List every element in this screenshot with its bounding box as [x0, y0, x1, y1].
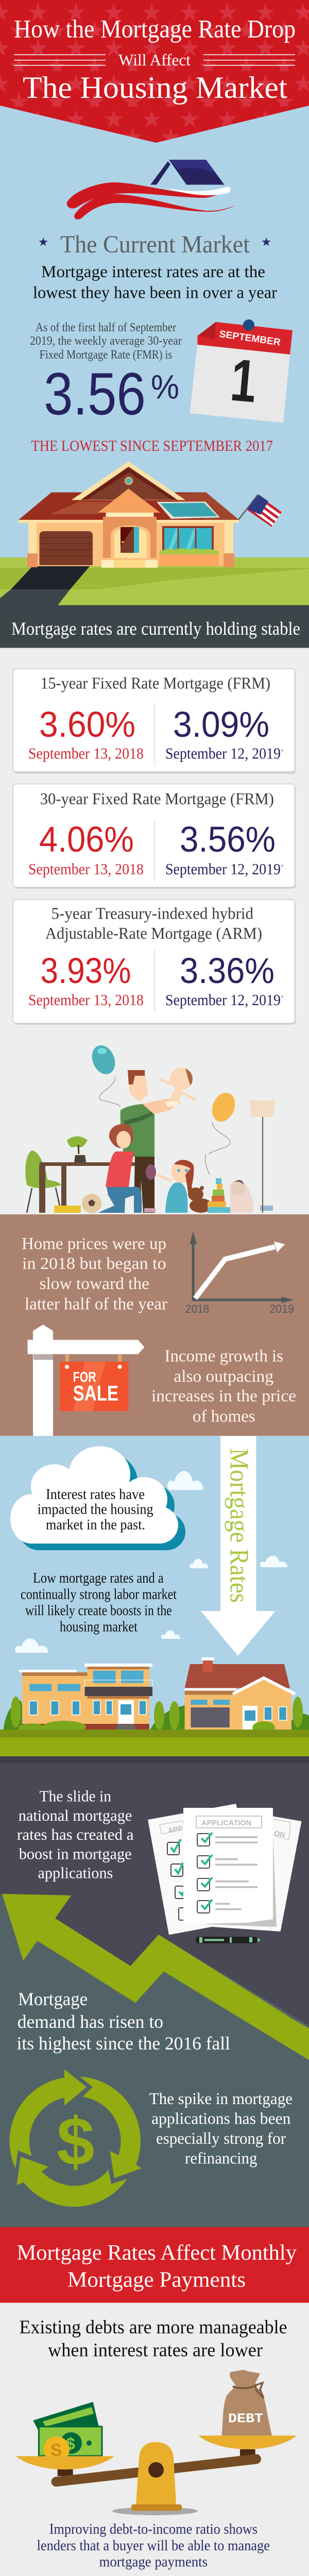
- balloon: teal: [88, 1042, 121, 1106]
- card: 30-year fixed: 3.56%: [180, 819, 276, 859]
- left pan with cash and coin: S: [50, 2441, 62, 2460]
- section: brown home prices: [0, 1214, 309, 1436]
- card: 5-year ARM: *: [281, 995, 284, 1001]
- text: income growth: increases in the price: [151, 1387, 296, 1405]
- text: debt-to-income ratio: [37, 2521, 270, 2570]
- card: 30-year fixed: [13, 784, 296, 889]
- big number: 3.56 percent: 3.56: [44, 361, 146, 428]
- girl with doll: [146, 1160, 194, 1213]
- illustration: suburban house with flag: [19, 462, 282, 568]
- baby: [160, 1067, 196, 1107]
- text: income growth: also outpacing: [174, 1367, 273, 1386]
- chart: home price growth 2018 to 2019: [185, 1232, 294, 1315]
- section: blue mortgage rates sky: [0, 1436, 309, 1732]
- card: 30-year fixed: September 12, 2019: [165, 860, 281, 878]
- section band: rates affect monthly payments: Mortgage Rates Affect Monthly: [16, 2241, 297, 2265]
- icon: house and flag swoosh logo: [67, 160, 235, 219]
- table and chair: [25, 1137, 142, 1213]
- text: as of first half of september: Fixed Mortgage Rate (FMR) is: [39, 348, 172, 362]
- card: 30-year fixed: 30-year Fixed Rate Mortgage (FRM): [40, 789, 274, 808]
- text: low mortgage rates and labor market: housing market: [60, 1619, 138, 1635]
- big number: 3.56 percent: %: [151, 368, 179, 406]
- icon: for sale sign: [28, 1325, 144, 1436]
- woman kneeling: [98, 1124, 142, 1213]
- pen: [196, 1937, 261, 1943]
- text: income growth: Income growth is: [165, 1347, 283, 1366]
- text: slide in national mortgage rates: boost in mortgage: [19, 1844, 132, 1863]
- section background: light blue market: [0, 103, 309, 605]
- cloud callout: interest rates: impacted the housing: [38, 1501, 153, 1518]
- icon: for sale sign: FOR: [73, 1369, 96, 1385]
- foreground shrubs: [19, 1721, 275, 1734]
- text: rates lowest in over a year: lowest they have been in over a year: [33, 284, 277, 302]
- header banner: [0, 0, 309, 143]
- text: low mortgage rates and labor market: continually strong labor market: [21, 1587, 177, 1602]
- text: low mortgage rates and labor market: will likely create boosts in the: [25, 1603, 172, 1619]
- text: home prices up in 2018: latter half of the year: [25, 1295, 167, 1314]
- text: low mortgage rates and labor market: Low mortgage rates and a: [33, 1570, 164, 1586]
- section band: rates holding stable: [0, 605, 309, 648]
- text: spike in applications for refinancing: refinancing: [185, 2148, 257, 2167]
- front page: APPLICATION: [201, 1819, 251, 1827]
- icon: refinance cycle with dollar: [9, 2069, 142, 2207]
- left pan with cash and coin: [16, 2402, 114, 2469]
- text: as of first half of september: 2019, the weekly average 30-year: [30, 334, 182, 348]
- text: mortgage demand highest since 2016: Mortgage: [18, 1989, 88, 2009]
- right pan with debt bag: DEBT: [228, 2411, 263, 2426]
- card: 15-year fixed: [13, 669, 296, 774]
- heading: the current market: The Current Market: [60, 231, 250, 258]
- text: spike in applications for refinancing: [149, 2089, 293, 2167]
- small clouds: [15, 1471, 287, 1653]
- card: 5-year ARM: 5-year Treasury-indexed hybrid: [52, 904, 253, 922]
- cloud shadow: [18, 1453, 185, 1550]
- trees and bushes: [3, 1697, 309, 1731]
- card: 5-year ARM: [13, 900, 296, 1025]
- card: 30-year fixed: 4.06%: [39, 819, 134, 859]
- left pan with cash and coin: $: [66, 2434, 75, 2453]
- left page: [148, 1804, 256, 1935]
- heading: existing debts manageable: [20, 2317, 287, 2361]
- left page: APP: [167, 1824, 183, 1835]
- text: spike in applications for refinancing: The spike in mortgage: [149, 2089, 293, 2108]
- text: mortgage demand highest since 2016: its highest since the 2016 fall: [16, 2033, 230, 2054]
- card: 30-year fixed: September 13, 2018: [28, 860, 144, 878]
- chart: home price growth 2018 to 2019: 2018: [185, 1302, 209, 1315]
- heading: existing debts manageable: Existing debts are more manageable: [20, 2317, 287, 2338]
- text: home prices up in 2018: Home prices were up: [22, 1235, 166, 1253]
- right page: [197, 1808, 302, 1931]
- card: 5-year ARM: Adjustable-Rate Mortgage (ARM): [45, 924, 262, 942]
- text: debt-to-income ratio: Improving debt-to-income ratio shows: [49, 2521, 258, 2537]
- illustration: family at home with balloons: [25, 1042, 276, 1213]
- text: as of first half of september: [30, 321, 182, 362]
- card: 15-year fixed: 3.09%: [173, 704, 269, 744]
- front page: [183, 1808, 273, 1924]
- title line 2: Will Affect: [118, 50, 191, 69]
- man holding baby: [121, 1070, 178, 1213]
- heading: existing debts manageable: when interest rates are lower: [48, 2340, 263, 2361]
- modern two-storey house: [19, 1664, 152, 1730]
- ground strip: [0, 1730, 309, 1763]
- banner shape with stars: [0, 0, 309, 143]
- card: 5-year ARM: September 13, 2018: [28, 991, 144, 1009]
- icon: calendar september 1: SEPTEMBER: [218, 329, 281, 348]
- card: 15-year fixed: 3.60%: [39, 704, 135, 744]
- title line 3: The Housing Market: [23, 71, 287, 105]
- card: 5-year ARM: 3.93%: [40, 951, 131, 991]
- text: debt-to-income ratio: mortgage payments: [99, 2554, 208, 2570]
- section background: light grey debts: [0, 2303, 309, 2576]
- text: mortgage demand highest since 2016: demand has risen to: [18, 2011, 163, 2032]
- cloud body: [10, 1446, 178, 1544]
- toys, teddy bear, blocks, dog and ball: [82, 1178, 273, 1213]
- text: rates lowest in over a year: Mortgage interest rates are at the: [41, 263, 265, 281]
- text: slide in national mortgage rates: national mortgage: [19, 1806, 132, 1824]
- card: 5-year ARM: September 12, 2019: [165, 991, 281, 1009]
- text: slide in national mortgage rates: rates has created a: [17, 1825, 134, 1843]
- icon: for sale sign: SALE: [73, 1381, 118, 1405]
- cloud callout: interest rates: [10, 1446, 185, 1550]
- arrow: mortgage rates down: Mortgage Rates: [225, 1448, 254, 1603]
- arrow: rising mortgage demand: [2, 1894, 309, 2060]
- text: spike in applications for refinancing: especially strong for: [156, 2129, 286, 2147]
- cloud callout: interest rates: Interest rates have: [46, 1487, 145, 1503]
- card: 15-year fixed: September 13, 2018: [28, 744, 144, 762]
- text: income growth: [151, 1347, 296, 1426]
- card: 5-year ARM: 3.36%: [180, 951, 274, 991]
- text: home prices up in 2018: [22, 1235, 167, 1314]
- text: rates lowest in over a year: [33, 263, 277, 302]
- section: application demand background: [0, 1763, 309, 2228]
- chart: home price growth 2018 to 2019: 2019: [270, 1302, 294, 1315]
- card: 30-year fixed: *: [281, 864, 284, 870]
- section band: rates affect monthly payments: Mortgage Payments: [67, 2268, 246, 2292]
- card: 15-year fixed: *: [281, 749, 284, 755]
- text: slide in national mortgage rates: The slide in: [39, 1787, 111, 1805]
- card: 15-year fixed: September 12, 2019: [165, 744, 281, 762]
- floor lamp: [249, 1100, 276, 1213]
- card: 15-year fixed: 15-year Fixed Rate Mortgage (FRM): [40, 674, 270, 692]
- icon: refinance cycle with dollar: $: [57, 2104, 94, 2179]
- text: spike in applications for refinancing: applications has been: [151, 2109, 290, 2127]
- text: the lowest since september 2017: THE LOWEST SINCE SEPTEMBER 2017: [31, 437, 273, 454]
- text: home prices up in 2018: slow toward the: [39, 1275, 149, 1293]
- section band: rates affect monthly payments: [0, 2227, 309, 2303]
- ground and driveway: [0, 557, 309, 605]
- illustration: balance scale money vs debt: [16, 2370, 297, 2515]
- section background: light grey rates: [0, 648, 309, 1215]
- icon: application forms and pen: [148, 1804, 302, 1943]
- cloud callout: interest rates: market in the past.: [46, 1517, 145, 1533]
- illustration: neighborhood houses: [3, 1657, 309, 1734]
- text: income growth: of homes: [193, 1407, 255, 1426]
- right page: ON: [274, 1829, 286, 1839]
- text: as of first half of september: As of the first half of September: [36, 321, 176, 334]
- gabled house with garage: [185, 1657, 295, 1730]
- text: home prices up in 2018: in 2018 but began to: [22, 1255, 166, 1273]
- arrow: mortgage rates down: [201, 1436, 276, 1656]
- icon: calendar september 1: [190, 319, 293, 423]
- text: slide in national mortgage rates: applications: [38, 1864, 113, 1882]
- balloon: yellow: [205, 1089, 239, 1175]
- text: mortgage demand highest since 2016: [16, 1989, 230, 2054]
- text: debt-to-income ratio: lenders that a buyer will be able to manage: [37, 2537, 270, 2554]
- text: low mortgage rates and labor market: [21, 1570, 177, 1635]
- right pan with debt bag: [198, 2370, 297, 2449]
- icon: calendar september 1: 1: [228, 346, 260, 415]
- text: slide in national mortgage rates: [17, 1787, 134, 1882]
